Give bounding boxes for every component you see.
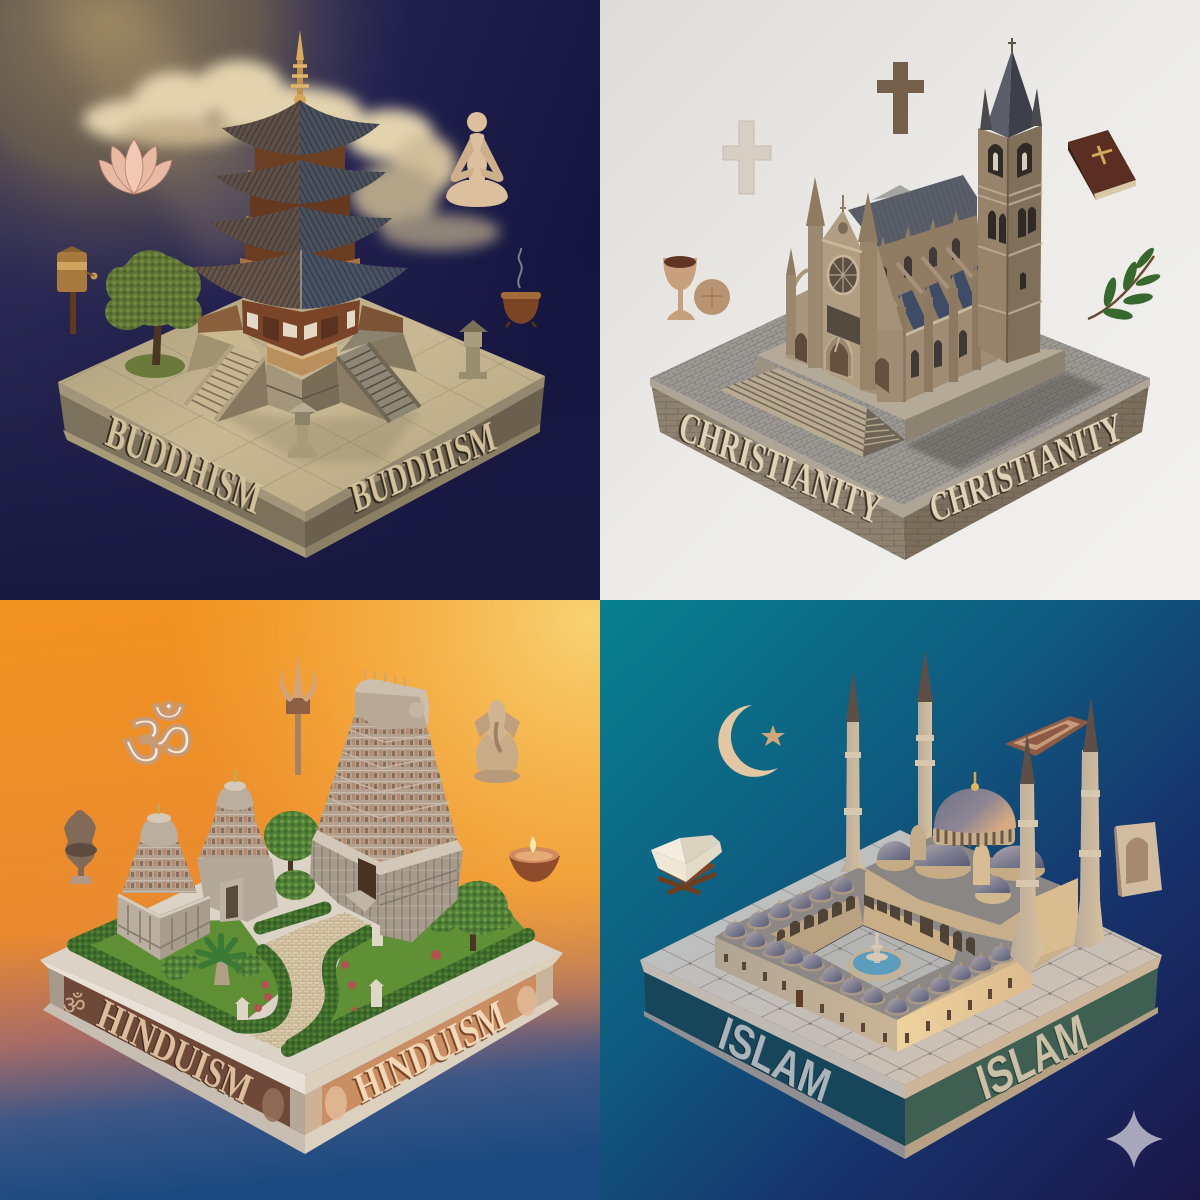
platform label left: CHRISTIANITY [675,402,886,535]
platform [58,272,545,558]
terrace walls [187,305,417,372]
platform label left: HINDUISM [92,990,258,1114]
secondary domes [876,825,1045,904]
garden [72,811,530,1050]
front minarets [1010,697,1104,975]
bottom roof [192,250,408,309]
platform label right: HINDUISM [349,991,512,1113]
courtyard fountain [847,933,907,982]
icon: stone lantern right [459,320,488,379]
pagoda [185,30,420,422]
main dome [933,772,1016,847]
shrine left [117,803,210,960]
aisle windows [911,320,990,378]
right tree [424,881,513,951]
arcade domes [722,874,1014,1016]
outer left wall [715,937,897,1052]
flying buttresses [877,248,972,307]
platform [640,830,1162,1159]
icon: diya lamp [509,836,560,882]
garden lanterns [235,920,385,1020]
middle hedge [260,908,325,928]
platform label right: BUDDHISM [347,412,500,523]
cobble path [250,912,372,1050]
gopuram roof [355,670,429,730]
bushes and flowers [161,944,441,1017]
left hedge [74,925,285,1027]
platform label left: ISLAM [713,1006,837,1113]
prayer hall [865,772,1078,958]
outer right wall [897,957,1033,1052]
icon: prayer wheel [57,246,98,334]
cathedral [786,38,1042,402]
panel: Christianity [600,0,1200,600]
icon: prayer rug [1005,716,1090,756]
right hedge [288,932,528,1050]
nave roof [848,175,977,247]
steps and plinth [720,340,1065,457]
spire [291,30,309,106]
icon: crescent and star [718,705,785,777]
icon: communion wafer [694,279,730,315]
icon: olive branch [1088,245,1162,322]
pinnacles [880,210,980,307]
icon: dark cross [877,62,924,134]
platform [40,835,563,1154]
panel: Islam [600,600,1200,1200]
icon: chalice [663,256,697,320]
platform label right: ISLAM [971,1004,1094,1112]
icon: light cross [723,121,771,194]
right staircase [337,343,420,422]
platform label left: BUDDHISM [101,405,267,525]
icon: stone lantern front [288,402,318,458]
carved deities [262,986,537,1122]
icon: ganesha statue [474,700,520,783]
aisle wall [903,296,998,402]
left staircase [185,345,268,422]
icon: ganesha bust [64,810,97,884]
clouds [83,60,500,250]
icon: quran on stand [651,835,722,893]
courtyard arches [777,892,975,956]
west facade [786,177,903,402]
icon: meditating figure [446,112,508,207]
platform label right: CHRISTIANITY [925,403,1126,532]
mosque [715,650,1104,1052]
icon: om: ॐ [122,697,194,787]
panel: Hinduism [0,600,600,1200]
top roof [222,100,380,155]
second roof [215,160,386,204]
carved om: ॐ [62,991,86,1021]
shrine right [197,770,278,922]
icon: incense burner [501,248,541,327]
buttress piers [897,278,981,402]
gopuram tower [310,670,463,942]
clerestory windows [879,238,960,288]
base pier [263,345,340,417]
icon: lotus [99,139,172,194]
back tree [264,811,320,900]
back minarets [840,650,935,872]
watermark sparkle [1106,1110,1163,1168]
wall windows [724,954,1012,1043]
ground floor hall [242,300,360,356]
icon: bodhi tree [105,250,202,378]
platform [650,270,1150,560]
third roof [210,206,392,254]
bell tower [978,38,1042,363]
clerestory wall [877,215,985,340]
icon: mihrab niche [1114,822,1162,897]
palm tree [198,936,244,985]
icon: trident [280,655,316,775]
portals [795,325,889,393]
aisle roofs [875,262,992,340]
rose window [828,256,858,294]
icon: bible [1068,130,1136,200]
courtyard complex [715,868,1078,1052]
panel: Buddhism [0,0,600,600]
